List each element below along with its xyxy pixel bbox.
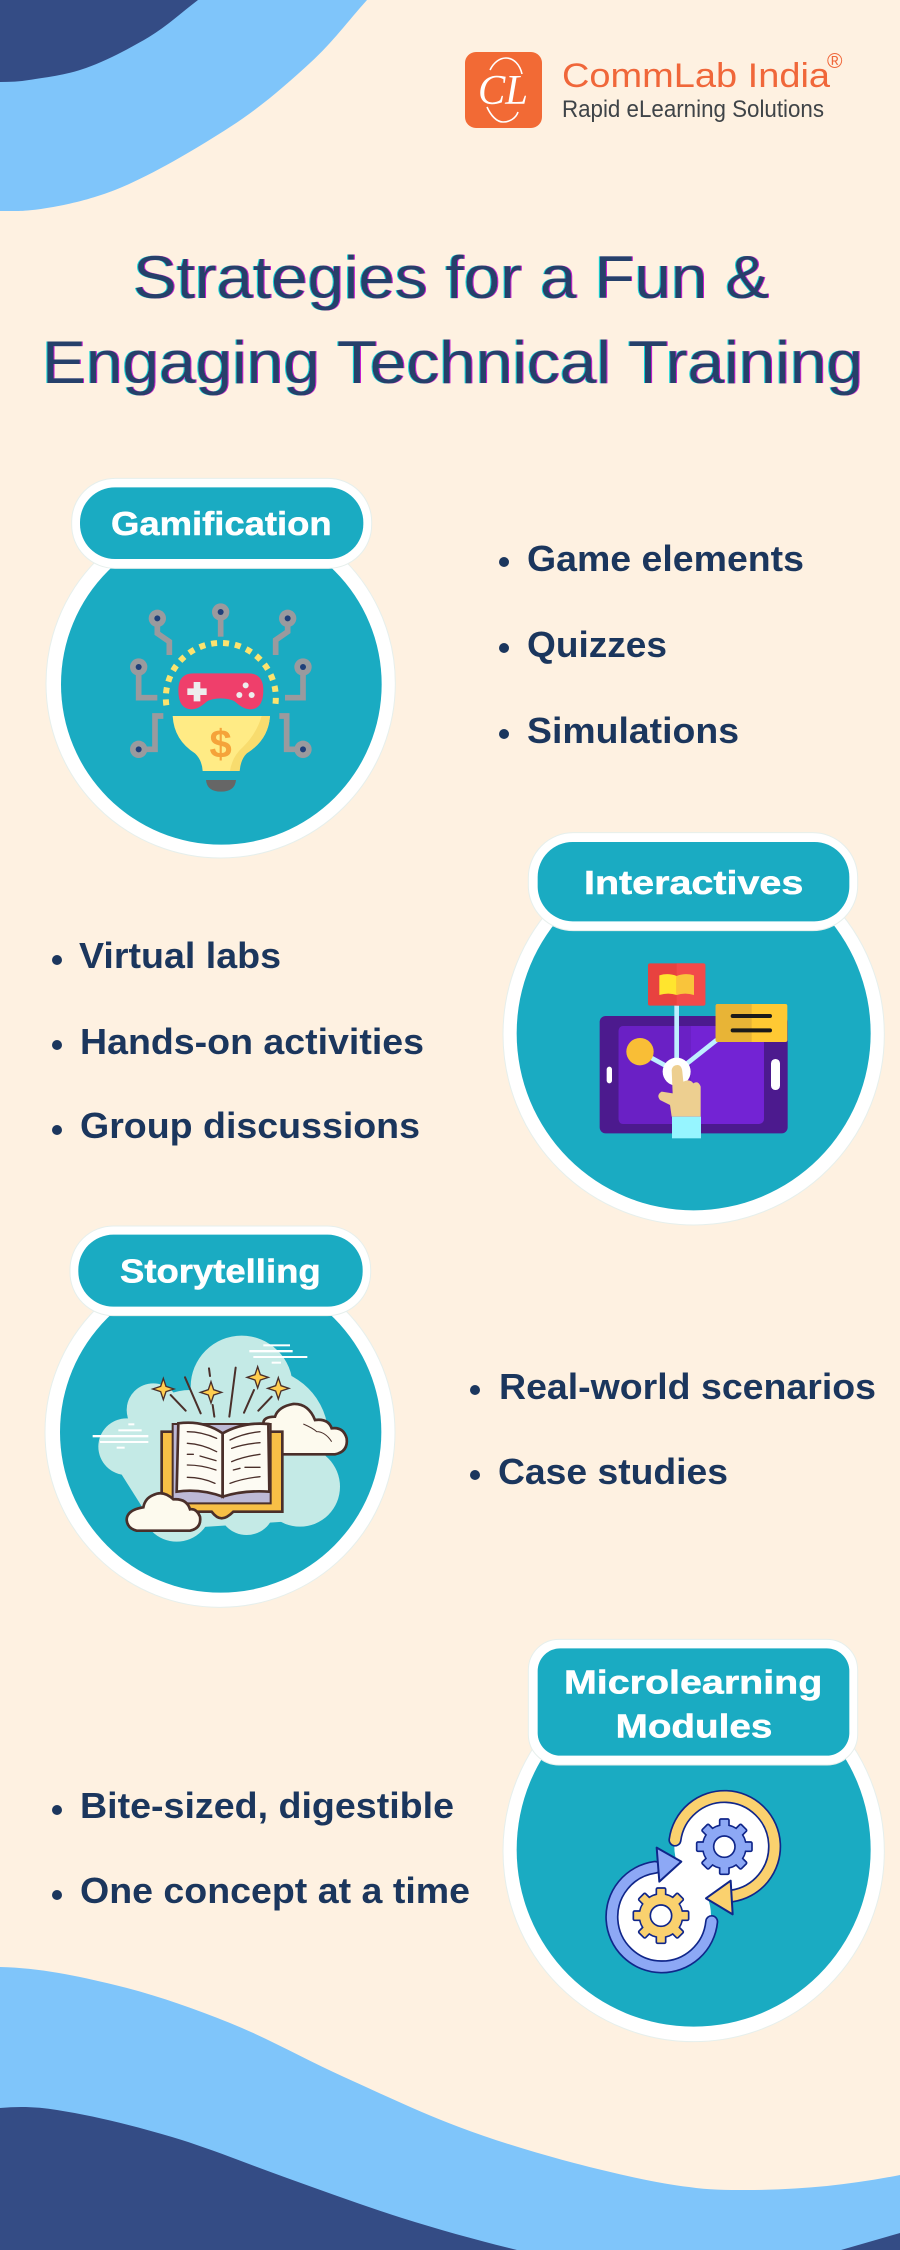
icon: tablet with touch interaction (600, 963, 788, 1138)
bottom corner wave: dark blue (841, 2233, 900, 2250)
logo mark: CL (478, 68, 528, 114)
list: interactives: Hands-on activities (80, 1021, 424, 1062)
list: storytelling: Real-world scenarios (499, 1366, 876, 1407)
logo (465, 50, 843, 128)
bottom wave: dark blue (0, 2107, 517, 2250)
heading pill: Interactives (584, 865, 803, 902)
top wave: dark blue (0, 0, 198, 82)
title: Strategies for a Fun & (133, 244, 769, 311)
heading pill: Gamification (111, 506, 332, 543)
heading pill: Modules (616, 1708, 772, 1745)
icon: open book with clouds and sparkles (93, 1336, 347, 1542)
list: microlearning (52, 1785, 470, 1911)
list: interactives: Group discussions (80, 1105, 420, 1146)
badge circle (503, 1660, 884, 2042)
bottom wave: light blue (0, 1967, 900, 2250)
list: interactives (52, 935, 424, 1146)
title: Engaging Technical Training (42, 329, 863, 396)
badge circle (45, 1257, 395, 1607)
list: storytelling: Case studies (498, 1451, 728, 1492)
heading pill (528, 833, 858, 931)
registered mark: ® (827, 50, 843, 73)
list: microlearning: Bite-sized, digestible (80, 1785, 454, 1826)
icon: cycling gears (611, 1797, 775, 1967)
list: storytelling (470, 1366, 876, 1492)
icon: light bulb with game controller: $ (210, 722, 232, 766)
top wave: light blue (0, 0, 367, 211)
heading pill: Storytelling (120, 1254, 321, 1291)
badge circle (46, 509, 395, 858)
heading pill (528, 1639, 858, 1765)
badge circle (503, 844, 884, 1225)
list: microlearning: One concept at a time (80, 1870, 470, 1911)
title (42, 244, 863, 396)
list: gamification: Game elements (527, 538, 804, 579)
panel: gamification badge (46, 478, 395, 858)
logo wordmark: CommLab India (562, 57, 830, 95)
panel: microlearning badge (503, 1639, 884, 2042)
logo mark (465, 52, 542, 128)
logo tagline: Rapid eLearning Solutions (562, 96, 824, 123)
heading pill (72, 478, 372, 568)
heading pill (70, 1226, 371, 1316)
heading pill: Microlearning (564, 1664, 822, 1701)
icon: light bulb with game controller (130, 603, 312, 792)
list: gamification (499, 538, 804, 751)
panel: interactives badge (503, 833, 884, 1225)
list: gamification: Simulations (527, 710, 739, 751)
list: gamification: Quizzes (527, 624, 667, 665)
list: interactives: Virtual labs (79, 935, 281, 976)
panel: storytelling badge (45, 1226, 395, 1607)
